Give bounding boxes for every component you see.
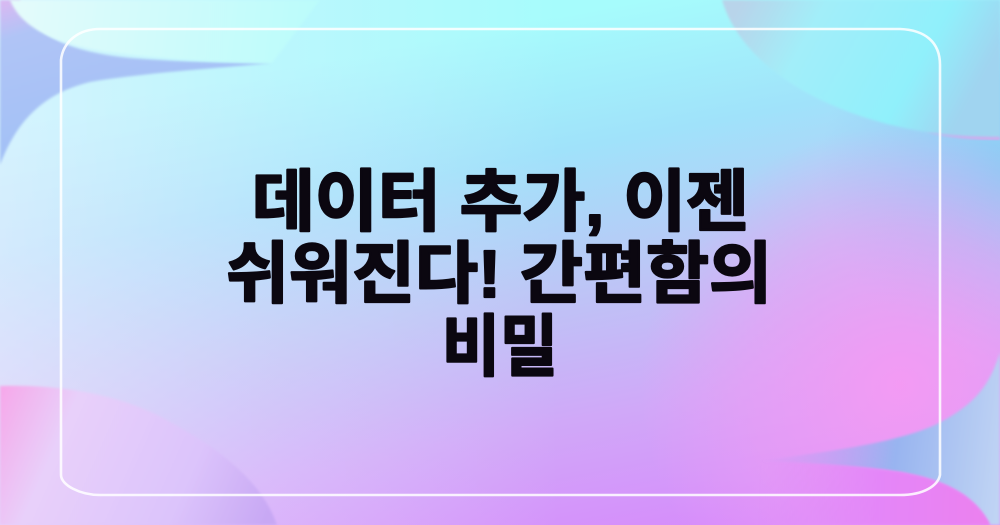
shape: bottom right blob [760,461,990,525]
white rounded frame [61,29,940,495]
shape: top right blob pink edge [925,132,1000,140]
shape: top right blob [722,0,1000,138]
title: 데이터 추가, 이젠 [252,165,749,240]
shape: top left wedge [0,0,272,165]
shape: bottom right wedge [760,352,1000,525]
title [226,165,772,385]
shape: top left blob [10,0,320,63]
title: 쉬워진다! 간편함의 [226,237,772,312]
shape: bottom left blob [0,386,277,525]
title: 비밀 [442,310,558,385]
